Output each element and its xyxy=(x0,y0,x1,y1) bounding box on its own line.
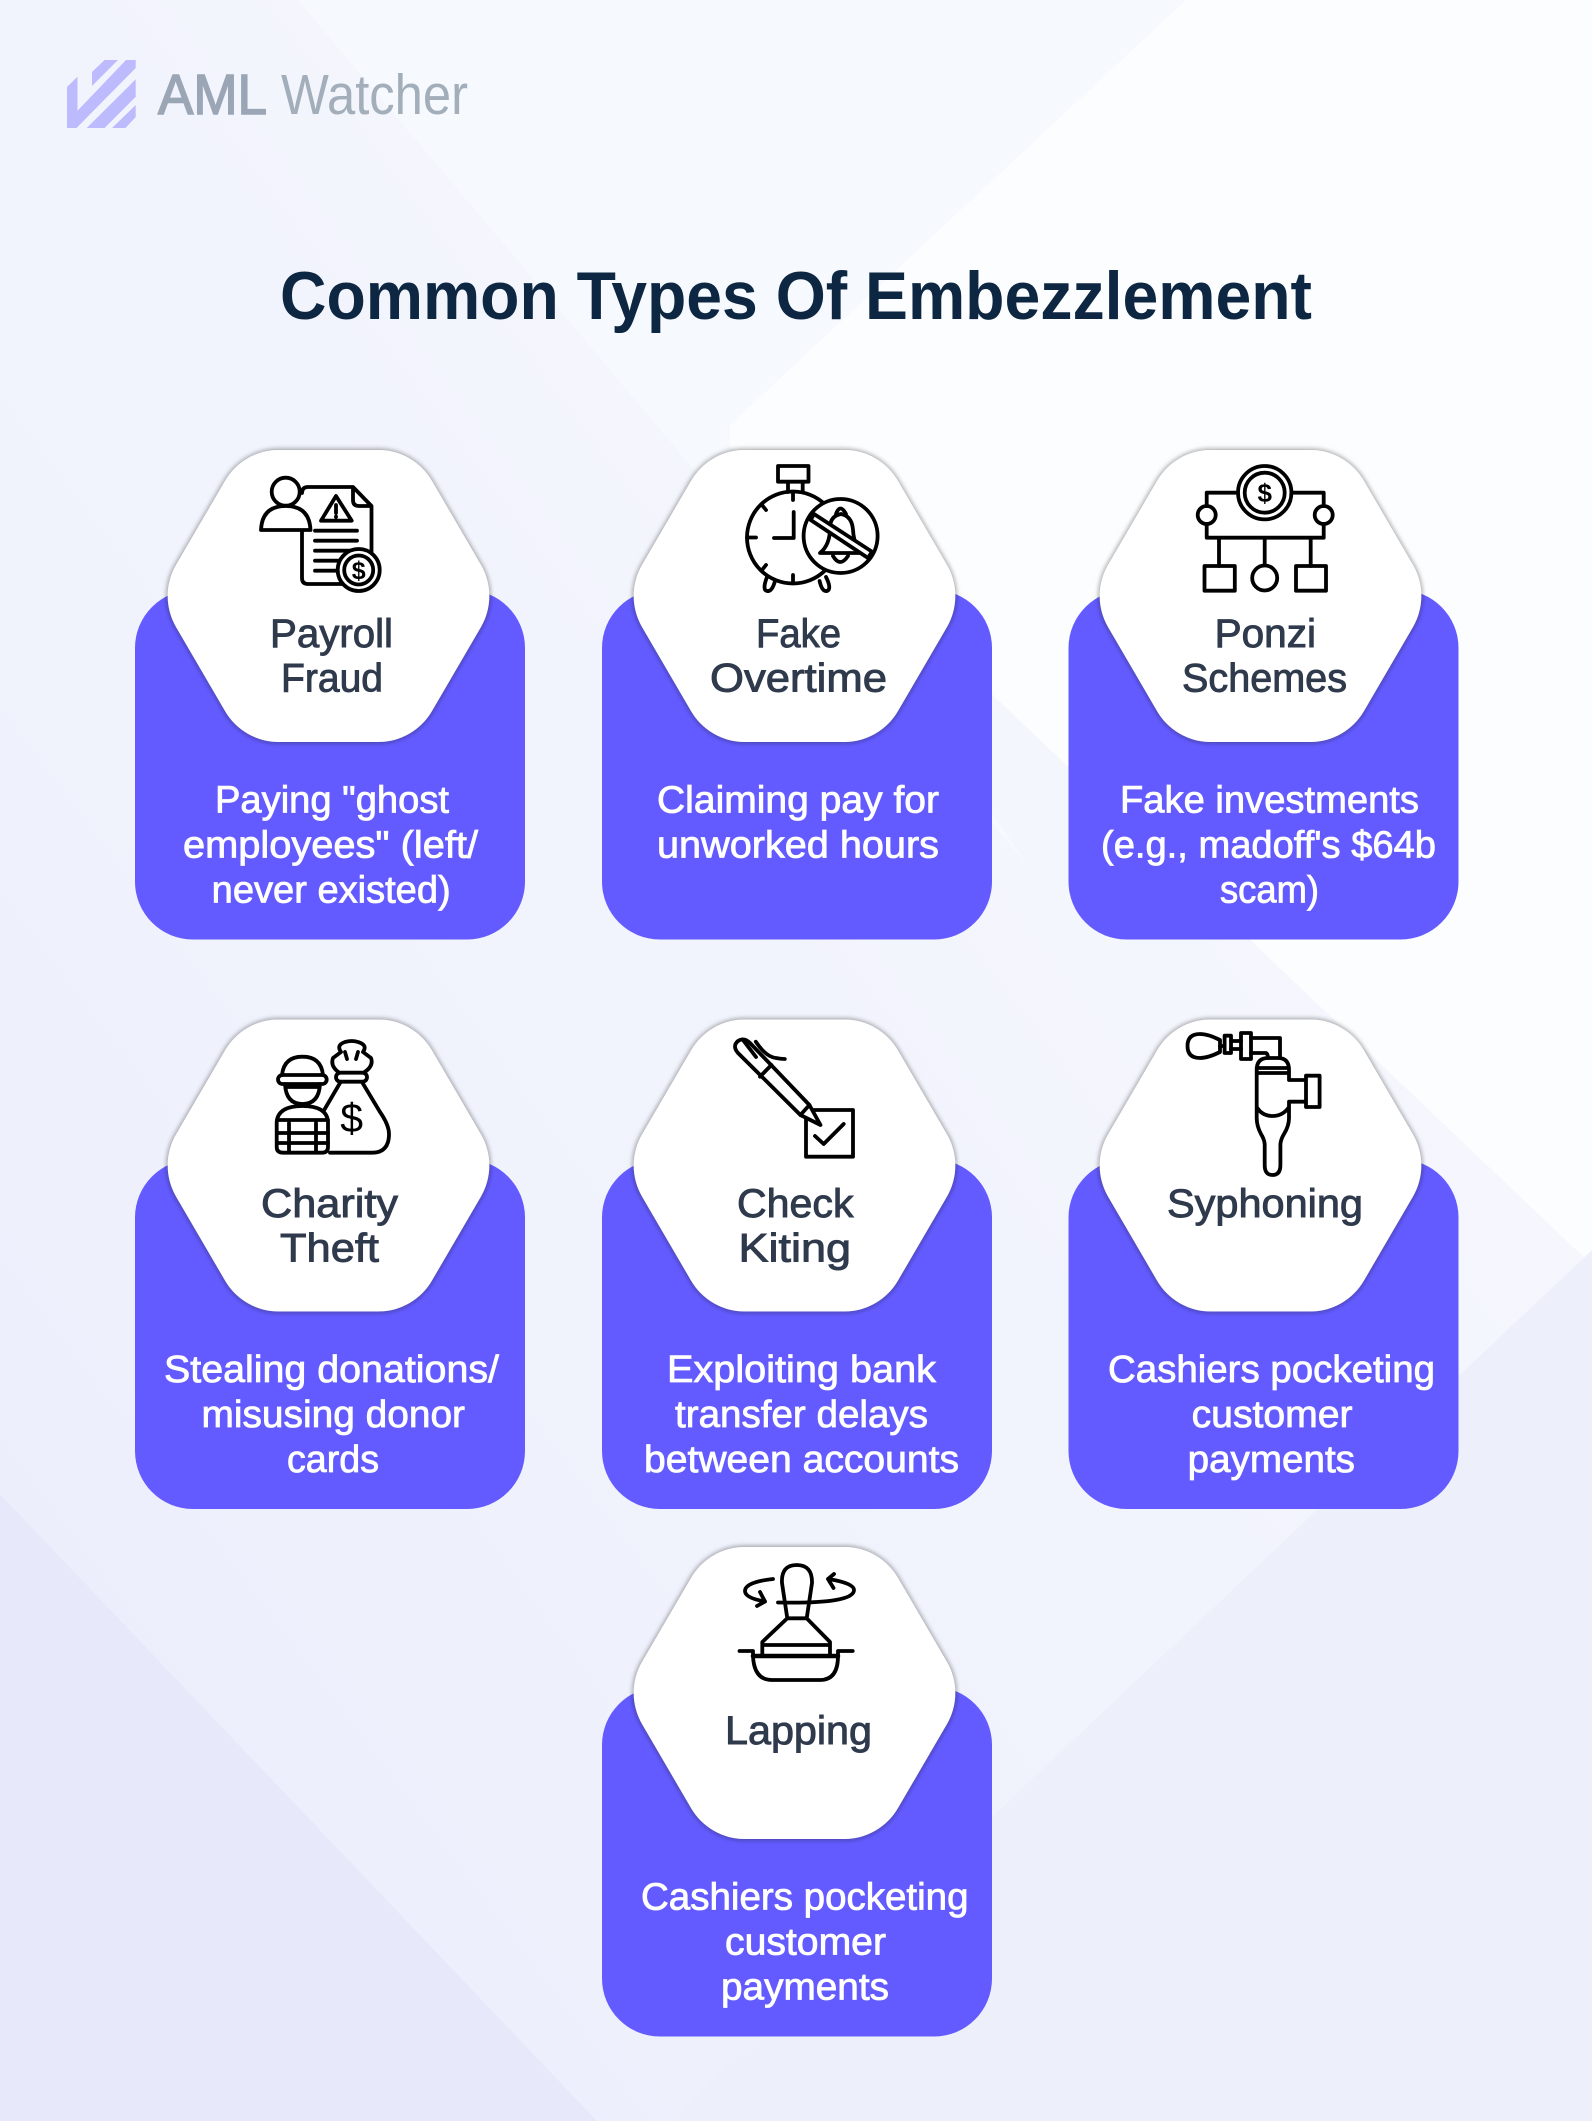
description: Cashiers pocketing xyxy=(641,1876,968,1918)
hexagon xyxy=(634,1547,955,1839)
label: Lapping xyxy=(725,1709,872,1753)
icon: lapping pot xyxy=(740,1565,854,1680)
logo wordmark: Watcher xyxy=(281,63,468,127)
label: Charity xyxy=(261,1182,398,1226)
hexagon xyxy=(1100,450,1421,742)
label: Payroll xyxy=(270,612,393,656)
label: Theft xyxy=(280,1226,379,1270)
logo: AML Watcher xyxy=(67,60,468,128)
description: employees" (left/ xyxy=(183,824,478,866)
description: Paying "ghost xyxy=(215,780,449,822)
label: Fraud xyxy=(281,657,383,701)
description: Claiming pay for xyxy=(657,780,939,822)
icon: pen and checkbox xyxy=(735,1039,853,1157)
description: customer xyxy=(1192,1394,1353,1436)
icon: payroll document: $ xyxy=(352,557,366,585)
icon: ponzi pyramid: $ xyxy=(1257,478,1272,508)
description: scam) xyxy=(1220,870,1319,912)
description: Exploiting bank xyxy=(667,1349,937,1391)
card: Payroll Fraud xyxy=(135,450,525,940)
description: payments xyxy=(721,1966,889,2008)
card: Lapping xyxy=(602,1547,992,2036)
label: Overtime xyxy=(710,657,887,701)
description: misusing donor xyxy=(202,1394,465,1436)
icon: ponzi pyramid xyxy=(1198,466,1333,591)
description: never existed) xyxy=(212,870,451,912)
icon: thief with money bag: $ xyxy=(340,1095,363,1141)
description: customer xyxy=(725,1922,886,1964)
hexagon xyxy=(634,1019,955,1312)
label: Syphoning xyxy=(1167,1182,1363,1226)
hexagon xyxy=(634,450,955,742)
label: Check xyxy=(737,1182,855,1226)
hexagon xyxy=(168,450,489,742)
logo wordmark: AML xyxy=(158,63,267,127)
card: Ponzi Schemes xyxy=(1068,450,1458,940)
description: between accounts xyxy=(644,1439,959,1481)
description: Fake investments xyxy=(1120,780,1419,822)
label: Kiting xyxy=(738,1226,851,1270)
description: payments xyxy=(1188,1439,1355,1481)
description: (e.g., madoff's $64b xyxy=(1101,824,1436,866)
hexagon xyxy=(168,1019,489,1312)
card: Fake Overtime xyxy=(602,450,992,940)
label: Ponzi xyxy=(1215,612,1316,656)
icon: thief with money bag xyxy=(277,1041,389,1153)
icon: alarm clock with muted bell xyxy=(747,466,878,591)
description: unworked hours xyxy=(657,824,939,866)
card: Check Kiting xyxy=(602,1019,992,1509)
description: Stealing donations/ xyxy=(164,1349,499,1391)
icon: logo mark xyxy=(67,60,136,128)
title: Common Types Of Embezzlement xyxy=(280,258,1312,334)
description: cards xyxy=(287,1439,379,1481)
icon: payroll document xyxy=(261,478,380,591)
hexagon xyxy=(1100,1019,1421,1312)
icon: siphon tap xyxy=(1188,1033,1320,1175)
label: Fake xyxy=(756,612,841,656)
card: Charity Theft xyxy=(135,1019,525,1509)
description: transfer delays xyxy=(675,1394,928,1436)
card: Syphoning xyxy=(1068,1019,1458,1509)
label: Schemes xyxy=(1182,657,1347,701)
description: Cashiers pocketing xyxy=(1108,1349,1435,1391)
